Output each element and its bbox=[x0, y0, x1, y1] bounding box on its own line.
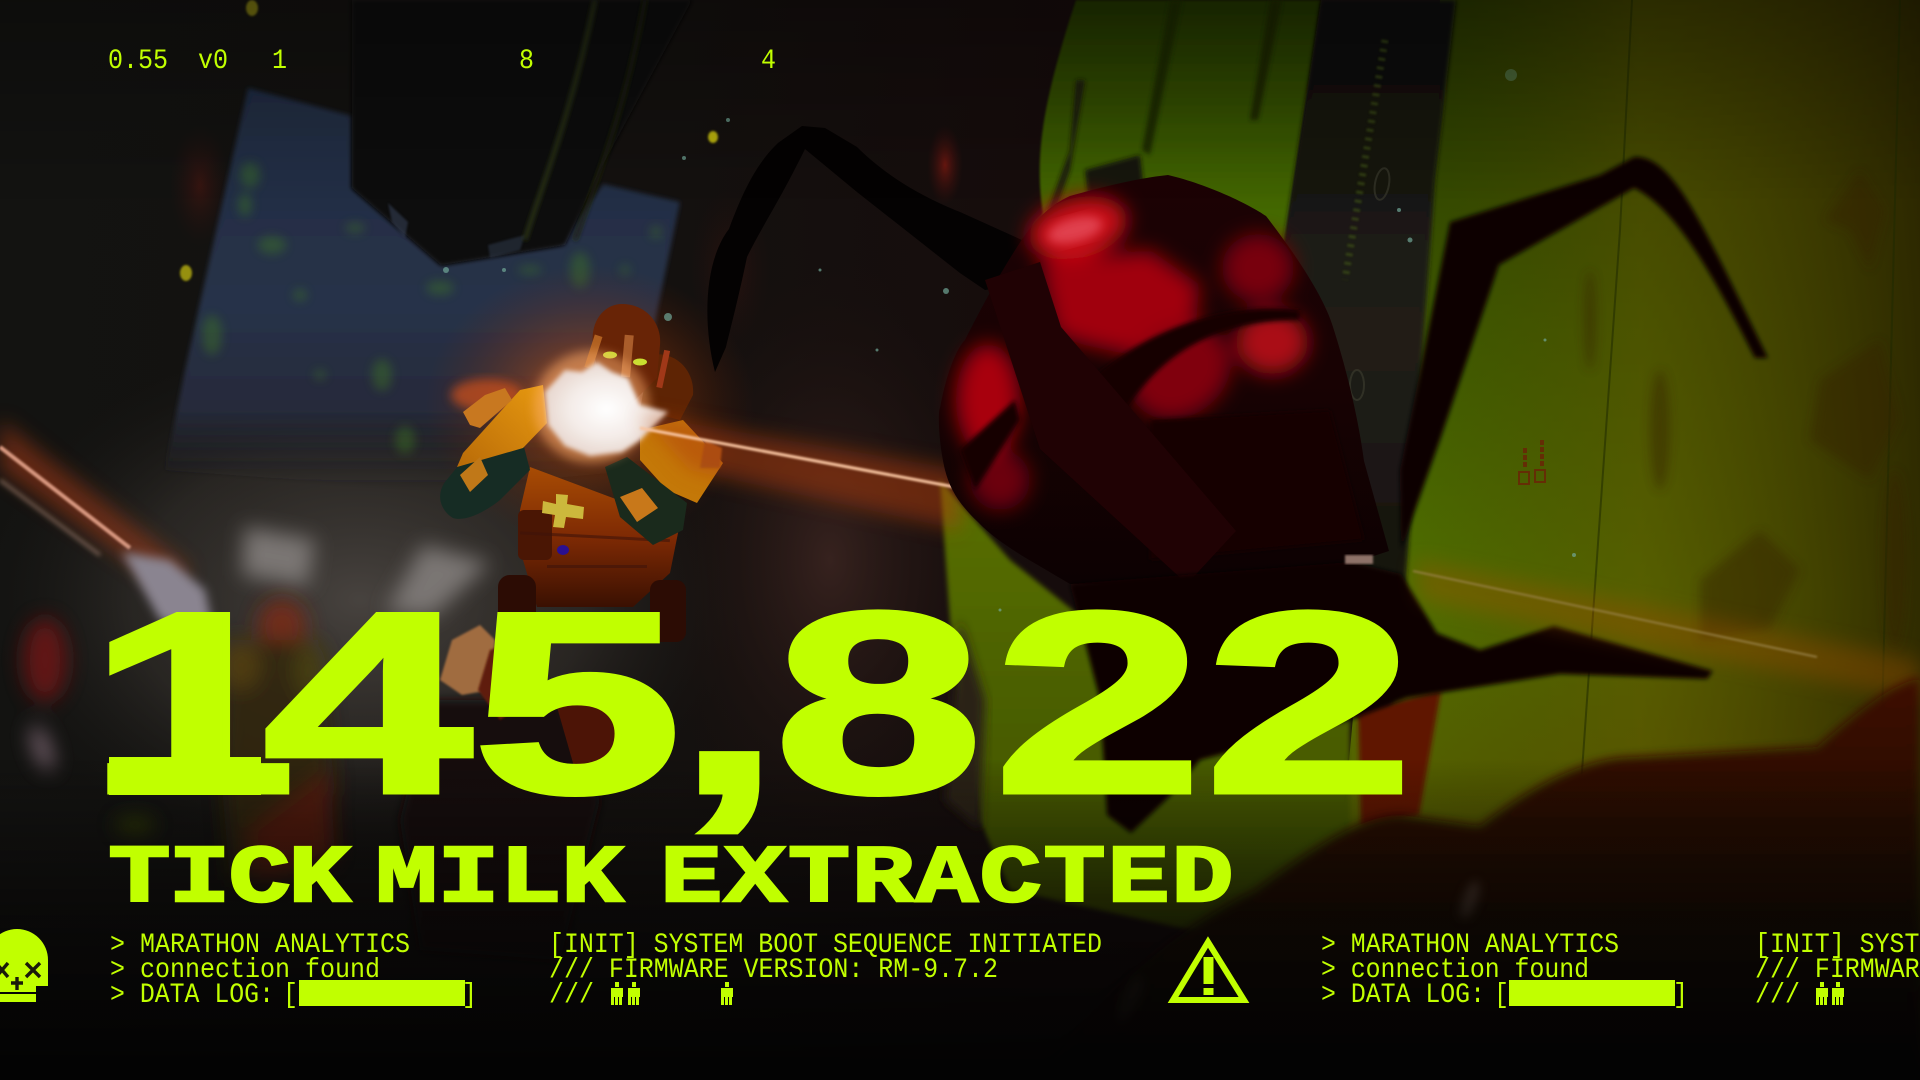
soldier back pack bbox=[640, 354, 693, 420]
red haze patches bbox=[170, 125, 963, 350]
terminal block 2 bbox=[549, 930, 1102, 1011]
top status readout: 8 bbox=[519, 46, 534, 77]
icon: warning triangle bbox=[1173, 942, 1244, 1000]
terminal block 3 bbox=[1321, 930, 1688, 1011]
wall seams and stains bbox=[1580, 0, 1900, 800]
terminal block 3: > DATA LOG: bbox=[1321, 980, 1485, 1011]
blurred background soldiers bbox=[23, 599, 335, 880]
terminal block 1: > DATA LOG: bbox=[110, 980, 274, 1011]
terminal block 1 bbox=[110, 930, 477, 1011]
data log bar bbox=[1509, 980, 1675, 1006]
laser beam to tick bbox=[640, 415, 960, 530]
tick front strut bbox=[985, 262, 1236, 584]
terminal block 3: [ bbox=[1494, 980, 1509, 1011]
top status readout: v0 bbox=[198, 46, 228, 77]
muzzle flash bbox=[534, 351, 668, 463]
rock highlights bbox=[1112, 879, 1483, 1027]
top status readout: 0.55 bbox=[108, 46, 168, 77]
top status readout bbox=[108, 46, 776, 77]
right beam bbox=[1413, 560, 1920, 700]
belt dot bbox=[557, 545, 569, 555]
terminal block 2: /// FIRMWARE VERSION: RM-9.7.2 bbox=[549, 955, 998, 986]
left laser beam bbox=[0, 420, 215, 640]
icon: skull bbox=[0, 929, 48, 1002]
top status readout: 4 bbox=[761, 46, 776, 77]
tick creature bbox=[707, 126, 1920, 833]
tick main body bbox=[939, 175, 1389, 585]
lower left haze bbox=[0, 260, 1010, 860]
tick lower body and leg bbox=[1070, 562, 1713, 833]
terminal block 3: > MARATHON ANALYTICS bbox=[1321, 930, 1619, 961]
blue window bbox=[165, 88, 680, 490]
dark grey wedge left of tick bbox=[945, 620, 985, 830]
subtitle: EXTRACTED bbox=[660, 833, 1235, 926]
top shade bbox=[0, 0, 1920, 200]
icon: person figures bbox=[1816, 982, 1844, 1005]
green panel behind tick bbox=[990, 0, 1321, 360]
terminal block 3: ] bbox=[1673, 980, 1688, 1011]
subtitle: MILK bbox=[375, 833, 624, 926]
data log bar bbox=[299, 980, 465, 1006]
icon: person figures bbox=[611, 982, 733, 1005]
terminal block 1: [ bbox=[283, 980, 298, 1011]
muzzle smear bbox=[451, 379, 523, 411]
terminal block 1: > MARATHON ANALYTICS bbox=[110, 930, 410, 961]
tick highlight bbox=[1045, 211, 1105, 249]
terminal block 3: > connection found bbox=[1321, 955, 1589, 986]
subtitle: TICK bbox=[108, 833, 351, 926]
soldier hips and pouches bbox=[498, 510, 686, 642]
cross emblem bbox=[542, 494, 584, 528]
base of numeral one bbox=[109, 757, 261, 795]
foreground red rock bbox=[1040, 678, 1920, 1080]
blurred lights bbox=[242, 527, 490, 616]
terminal block 1: > connection found bbox=[110, 955, 380, 986]
tick far leg bbox=[707, 126, 1045, 372]
machinery column bbox=[1272, 0, 1456, 740]
bottom shade bbox=[0, 760, 1920, 1080]
green wall right bbox=[1320, 0, 1920, 1080]
soldier bbox=[400, 265, 960, 960]
green specks on window bbox=[202, 162, 662, 454]
tick glowing red patches bbox=[956, 186, 1308, 510]
yellow embers bbox=[180, 0, 718, 281]
soldier helmet bbox=[584, 304, 670, 402]
exit sign bbox=[1358, 690, 1441, 826]
overhead dark ship bbox=[352, 0, 692, 265]
tick right leg bbox=[1400, 157, 1768, 550]
soldier legs bbox=[400, 625, 670, 960]
top status readout: 1 bbox=[272, 46, 287, 77]
muzzle glow bbox=[425, 265, 755, 545]
floating particles bbox=[443, 69, 1576, 612]
terminal block 2: [INIT] SYSTEM BOOT SEQUENCE INITIATED bbox=[549, 930, 1102, 961]
soldier torso bbox=[520, 467, 680, 607]
tick dark bands bbox=[960, 308, 1364, 560]
soldier arms bbox=[440, 385, 723, 545]
main number: 145,822 bbox=[87, 559, 1414, 847]
low green panel under tick bbox=[940, 480, 1350, 950]
terminal block 4: /// bbox=[1755, 980, 1800, 1011]
terminal block 1: ] bbox=[462, 980, 477, 1011]
terminal block 2: /// bbox=[549, 980, 594, 1011]
terminal block 4 bbox=[1755, 930, 1920, 1011]
